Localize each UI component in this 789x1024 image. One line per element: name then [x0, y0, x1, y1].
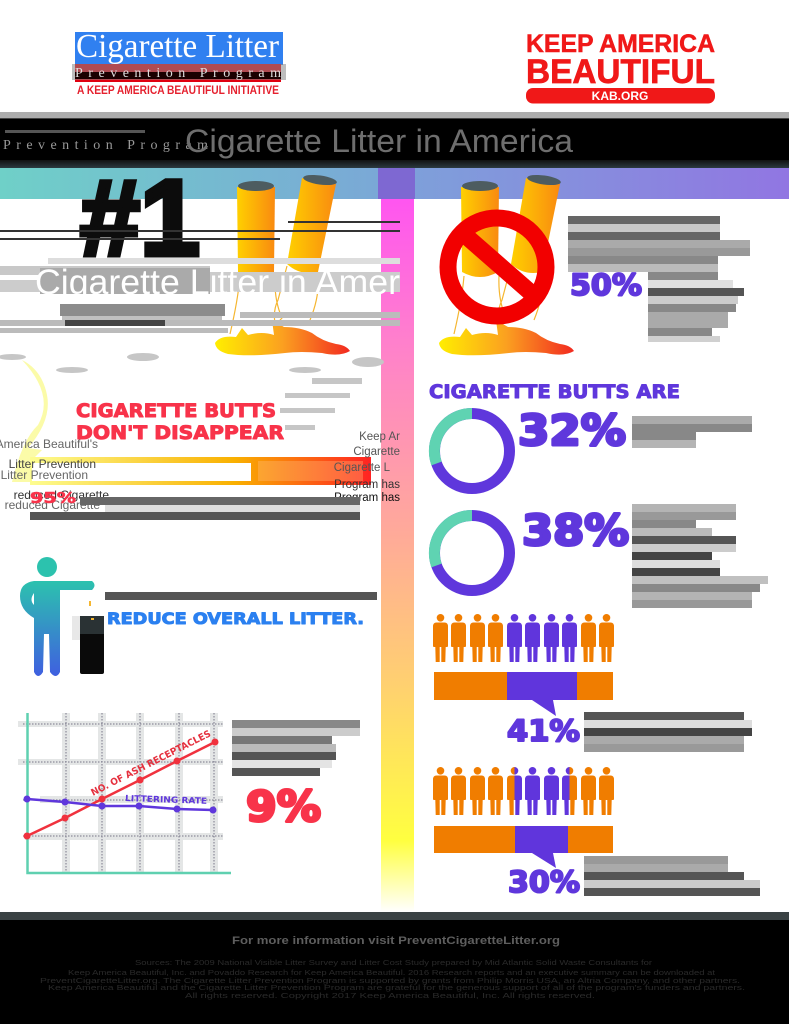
- footer: Keep America Beautiful, Inc. and Povaddo Research for Keep America Beautiful. 2016 Research reports and an executive summary can be downloaded at: [68, 968, 716, 977]
- overlapping body text, left: Litter Prevention: [1, 468, 88, 482]
- text: reduce overall litter: [105, 592, 377, 628]
- bar with callout: 30%: [434, 826, 613, 868]
- logo: Keep America Beautiful: KEEP AMERICA: [526, 30, 715, 58]
- vertical gradient strip: [381, 199, 414, 912]
- title bar: Prevention Program: [3, 138, 208, 153]
- overlapping body text, right: Program has: [334, 479, 400, 491]
- colour band: [0, 168, 789, 199]
- overlapping body text, right: [334, 431, 400, 504]
- title bar: Cigarette Litter in America: [185, 123, 573, 159]
- overlapping body text, left: reduced Cigarette: [14, 488, 109, 502]
- overlapping body text, left: Litter Prevention: [9, 457, 96, 471]
- number one heading: #1: [80, 157, 200, 278]
- centre purple block: [378, 168, 415, 199]
- donut: 32%: [434, 413, 510, 488]
- overlapping body text, right: Cigarette: [353, 446, 400, 458]
- footer: PreventCigaretteLitter.org. The Cigarette Litter Prevention Program is supported by grants from Philip Morris USA, an Altria Company, and other partners.: [40, 976, 740, 985]
- logo: Cigarette Litter Prevention Program: Cigarette Litter: [76, 28, 280, 65]
- overlapping body text, right: Keep Ar: [359, 431, 400, 443]
- text beside no-smoking sign, illegible: [568, 216, 750, 342]
- text for 32%, illegible: [632, 416, 752, 448]
- chart caption, illegible: [232, 720, 360, 776]
- stat: 95%: 95%: [30, 489, 76, 507]
- ghost heading: Cigarette Litter in Amer: [35, 263, 400, 302]
- overlapping body text, right: Cigarette L: [334, 462, 391, 474]
- cigarette butts illustration: [215, 173, 350, 355]
- line chart: ash receptacles vs littering rate: NO. OF ASH RECEPTACLES: [89, 728, 213, 799]
- stat: 41%: 41%: [507, 714, 580, 748]
- title bar: [0, 112, 789, 168]
- heading: cigarette butts don't disappear: [76, 400, 284, 444]
- pictogram row: 30%: [433, 767, 614, 815]
- heading: cigarette butts don't disappear: CIGARETTE BUTTS: [76, 400, 276, 422]
- stat: 50%: 50%: [570, 268, 642, 302]
- logo: Cigarette Litter Prevention Program: [72, 28, 286, 97]
- stat: 9%: 9%: [246, 782, 321, 831]
- logo: Cigarette Litter Prevention Program: Prevention Program: [75, 66, 281, 81]
- logo: Keep America Beautiful: KAB.ORG: [592, 89, 648, 103]
- cigarette bar: [30, 457, 371, 485]
- overlapping body text, left: reduced Cigarette: [5, 498, 100, 512]
- icon: person dropping butt in bin: [20, 557, 104, 676]
- line chart: ash receptacles vs littering rate: LITTERING RATE: [125, 794, 207, 807]
- scattered smudges: [0, 353, 384, 430]
- heading: cigarette butts are: CIGARETTE BUTTS ARE: [429, 381, 680, 403]
- stat: 32%: 32%: [518, 406, 626, 455]
- stat: 30%: 30%: [508, 865, 580, 899]
- text: reduce overall litter: REDUCE OVERALL LITTER.: [107, 609, 364, 628]
- body text, illegible: [30, 497, 360, 520]
- donut: 38%: [434, 515, 510, 590]
- overlapping body text, left: [0, 437, 109, 512]
- text for 30%, illegible: [584, 856, 760, 896]
- text for 41%, illegible: [584, 712, 752, 752]
- heading: cigarette butts don't disappear: DON'T DISAPPEAR: [76, 422, 284, 444]
- footer: [0, 912, 789, 1024]
- stat: 38%: 38%: [522, 506, 629, 555]
- footer: All rights reserved. Copyright 2017 Keep America Beautiful, Inc. All rights reserved.: [185, 991, 595, 1000]
- footer: Keep America Beautiful and the Cigarette Litter Prevention Program are grateful for the generous support of all of the program's funders and partners.: [48, 983, 745, 992]
- line chart: ash receptacles vs littering rate: [18, 713, 231, 873]
- no-smoking butts illustration: [439, 173, 574, 355]
- overlapping body text, right: Program has: [334, 492, 400, 504]
- bar with callout: 41%: [434, 672, 613, 716]
- logo: Keep America Beautiful: [526, 30, 715, 104]
- ghost heading: [0, 258, 400, 333]
- footer: For more information visit PreventCigaretteLitter.org: [232, 935, 560, 947]
- logo: Cigarette Litter Prevention Program: A KEEP AMERICA BEAUTIFUL INITIATIVE: [77, 83, 279, 97]
- pale yellow arc: [12, 360, 48, 482]
- pictogram row: 41%: [433, 614, 614, 662]
- footer: Sources: The 2009 National Visible Litter Survey and Litter Cost Study prepared by Mid Atlantic Solid Waste Consultants for: [135, 958, 653, 967]
- logo: Keep America Beautiful: BEAUTIFUL: [526, 53, 715, 91]
- text for 38%, illegible: [632, 504, 768, 608]
